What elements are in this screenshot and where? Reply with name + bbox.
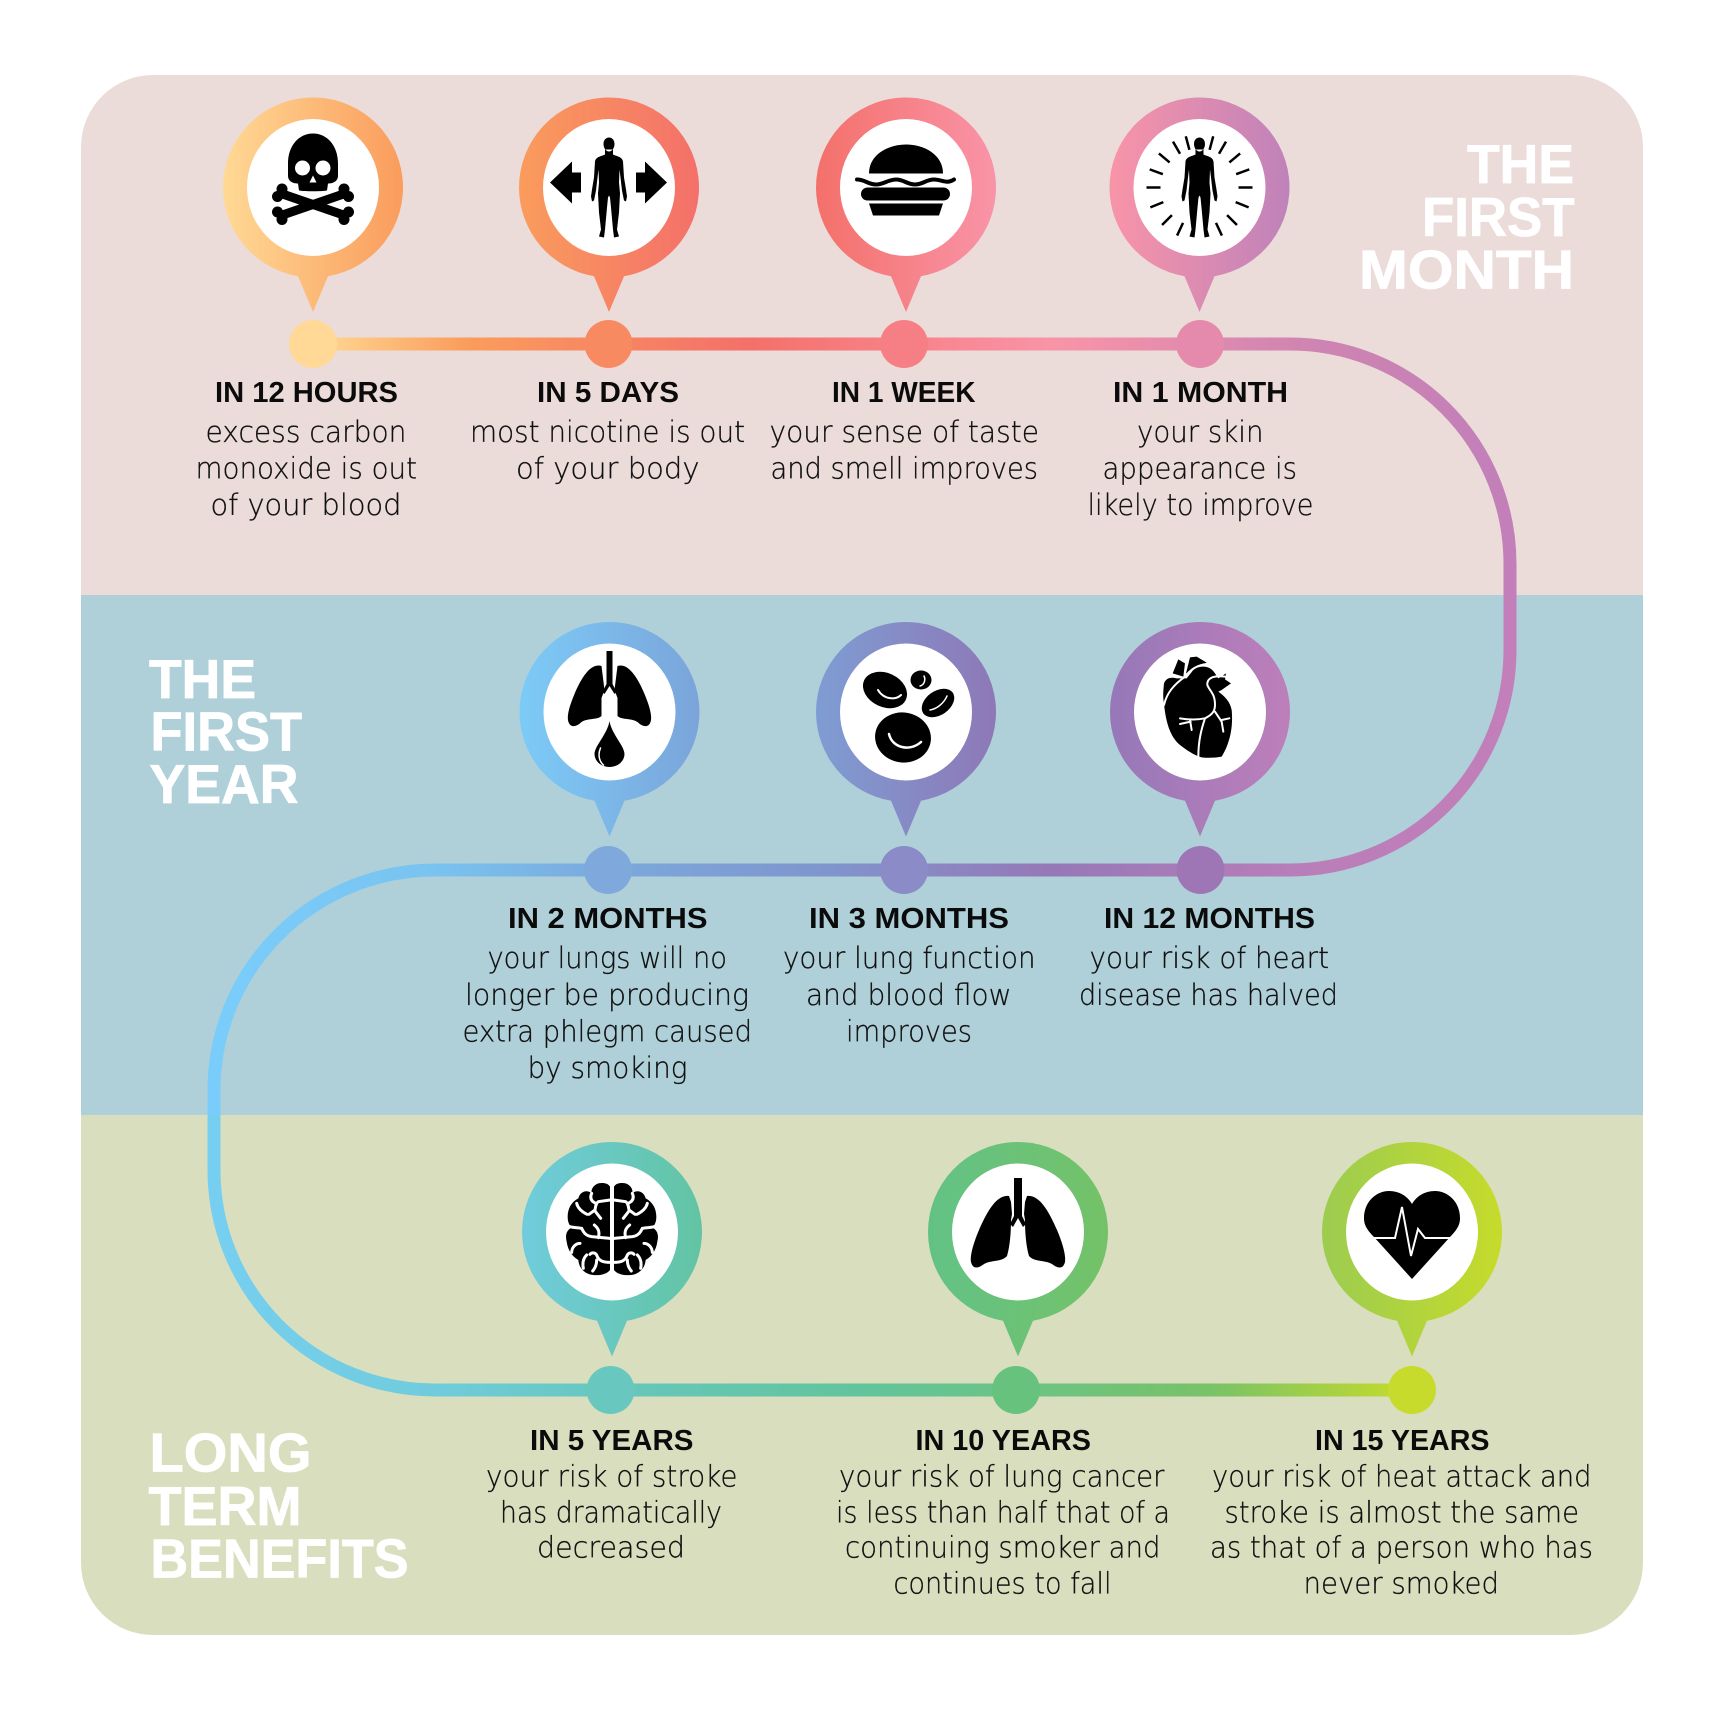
heading: the first year: THE — [149, 648, 256, 710]
text: in 15 years: never smoked — [1304, 1566, 1499, 1600]
text: in 5 years — [486, 1425, 738, 1564]
text: in 3 months: your lung function — [783, 941, 1036, 975]
pin: 1 week burger — [816, 97, 996, 312]
pin centre — [840, 644, 972, 780]
heading: the first month: MONTH — [1359, 238, 1574, 300]
timeline: first month stretch — [313, 344, 1510, 596]
icon: burger — [857, 144, 954, 216]
timeline: first year stretch — [214, 595, 1510, 1116]
band: long term benefits — [81, 1115, 1643, 1635]
node: 1 month — [1176, 320, 1224, 368]
node: 5 years — [586, 1366, 634, 1414]
heading: the first year: YEAR — [150, 753, 298, 815]
pin body — [522, 1142, 702, 1356]
text: in 1 month: likely to improve — [1088, 488, 1314, 522]
icon: skull and crossbones — [272, 134, 354, 225]
text: in 10 years: continuing smoker and — [845, 1530, 1160, 1564]
text: in 1 week — [770, 377, 1039, 486]
heading: long term benefits: LONG — [150, 1422, 312, 1484]
text: in 10 years — [836, 1425, 1170, 1600]
text: in 2 months: longer be producing — [465, 978, 749, 1012]
node: 2 months — [584, 846, 632, 894]
text: in 15 years: IN 15 YEARS — [1315, 1425, 1490, 1457]
text: in 3 months: and blood flow — [806, 978, 1012, 1012]
text: in 12 hours: IN 12 HOURS — [215, 377, 398, 409]
heading: the first month: THE — [1467, 133, 1574, 195]
node: 3 months — [880, 846, 928, 894]
band: the first month — [81, 75, 1643, 595]
node: 1 week — [880, 320, 928, 368]
icon: brain — [566, 1183, 658, 1275]
text: in 3 months — [783, 903, 1036, 1048]
pin body — [519, 97, 699, 312]
pin: 12 hours skull — [223, 97, 403, 312]
heading: the first year: FIRST — [150, 700, 302, 762]
pin body — [1110, 622, 1290, 836]
pin body — [1110, 97, 1290, 312]
pin body — [520, 622, 700, 836]
text: in 12 hours: of your blood — [210, 488, 402, 522]
text: in 5 years: IN 5 YEARS — [530, 1425, 694, 1457]
pin: 15 years heart with pulse — [1322, 1142, 1502, 1356]
left hemisphere — [566, 1183, 610, 1275]
text: in 1 week: and smell improves — [770, 452, 1038, 486]
node: 12 hours — [289, 320, 337, 368]
heading: long term benefits: BENEFITS — [150, 1528, 408, 1590]
text: in 2 months: by smoking — [528, 1051, 688, 1085]
text: in 5 days: most nicotine is out — [470, 415, 745, 449]
pin centre — [840, 119, 972, 256]
pin: 5 years brain — [522, 1142, 702, 1356]
text: in 1 month — [1088, 377, 1314, 522]
pin centre — [1134, 644, 1266, 780]
text: in 2 months: extra phlegm caused — [462, 1014, 752, 1048]
heading: the first month — [1359, 133, 1574, 300]
node: 5 days — [584, 320, 632, 368]
pin: 12 months heart — [1110, 622, 1290, 836]
text: in 12 months: IN 12 MONTHS — [1104, 903, 1315, 935]
text: in 15 years: as that of a person who has — [1210, 1530, 1593, 1564]
text: in 10 years: your risk of lung cancer — [839, 1460, 1165, 1494]
band: the first year — [81, 595, 1643, 1115]
text: in 15 years: your risk of heat attack and — [1212, 1460, 1592, 1494]
text: in 5 days: of your body — [516, 452, 700, 486]
pin centre — [1346, 1164, 1478, 1300]
pin centre — [543, 119, 675, 256]
text: in 5 years: has dramatically — [500, 1496, 722, 1530]
node: 15 years — [1388, 1366, 1436, 1414]
text: in 10 years: IN 10 YEARS — [916, 1425, 1091, 1457]
pin centre — [546, 1164, 678, 1300]
icon: body with rays — [1146, 136, 1252, 238]
timeline path — [214, 344, 1510, 1390]
text: in 5 days — [470, 377, 745, 486]
text: in 12 months — [1079, 903, 1338, 1012]
node: 12 months — [1176, 846, 1224, 894]
text: in 12 hours — [196, 377, 417, 522]
pin centre — [544, 644, 676, 780]
heading: long term benefits — [148, 1422, 408, 1590]
text: in 15 years: stroke is almost the same — [1224, 1496, 1579, 1530]
pin centre — [952, 1164, 1084, 1300]
pin body — [816, 97, 996, 312]
pin body — [816, 622, 996, 836]
text: in 2 months — [462, 903, 752, 1085]
text: in 2 months: your lungs will no — [488, 941, 727, 975]
timeline: long term stretch — [214, 1115, 1412, 1390]
text: in 1 week: your sense of taste — [770, 415, 1039, 449]
text: in 10 years: is less than half that of a — [836, 1496, 1170, 1530]
text: in 3 months: improves — [846, 1014, 972, 1048]
icon: body with arrows — [550, 138, 667, 238]
text: in 12 hours: monoxide is out — [196, 452, 417, 486]
text: in 12 hours: excess carbon — [206, 415, 406, 449]
icon: lungs — [971, 1178, 1065, 1268]
pin centre — [1134, 119, 1266, 256]
text: in 15 years — [1210, 1425, 1593, 1600]
text: in 12 months: your risk of heart — [1090, 941, 1329, 975]
text: in 1 month: appearance is — [1102, 452, 1297, 486]
pin: 5 days body with arrows — [519, 97, 699, 312]
right hemisphere — [614, 1183, 658, 1275]
text: in 1 week: IN 1 WEEK — [832, 377, 976, 409]
icon: heart with pulse — [1362, 1191, 1462, 1279]
pin body — [1322, 1142, 1502, 1356]
pin centre — [247, 119, 379, 256]
icon: anatomical heart — [1163, 657, 1232, 758]
pin body — [223, 97, 403, 312]
text: in 1 month: IN 1 MONTH — [1113, 377, 1288, 409]
pin: 1 month glowing body — [1110, 97, 1290, 312]
text: in 12 months: disease has halved — [1079, 978, 1338, 1012]
text: in 5 years: your risk of stroke — [486, 1460, 738, 1494]
icon: blood cells — [857, 665, 960, 766]
pin: 3 months blood cells — [816, 622, 996, 836]
heading: long term benefits: TERM — [148, 1475, 302, 1537]
text: in 5 years: decreased — [537, 1530, 685, 1564]
text: in 10 years: continues to fall — [894, 1566, 1112, 1600]
text: in 3 months: IN 3 MONTHS — [809, 903, 1009, 935]
icon: lungs and drop — [568, 651, 651, 767]
heading: the first month: FIRST — [1422, 186, 1574, 248]
pin body — [928, 1142, 1108, 1356]
text: in 5 days: IN 5 DAYS — [537, 377, 679, 409]
heading: the first year — [149, 648, 302, 815]
pin: 10 years lungs — [928, 1142, 1108, 1356]
text: in 2 months: IN 2 MONTHS — [508, 903, 708, 935]
timeline nodes — [289, 320, 1436, 1414]
pin: 2 months lungs and drop — [520, 622, 700, 836]
node: 10 years — [992, 1366, 1040, 1414]
text: in 1 month: your skin — [1137, 415, 1264, 449]
